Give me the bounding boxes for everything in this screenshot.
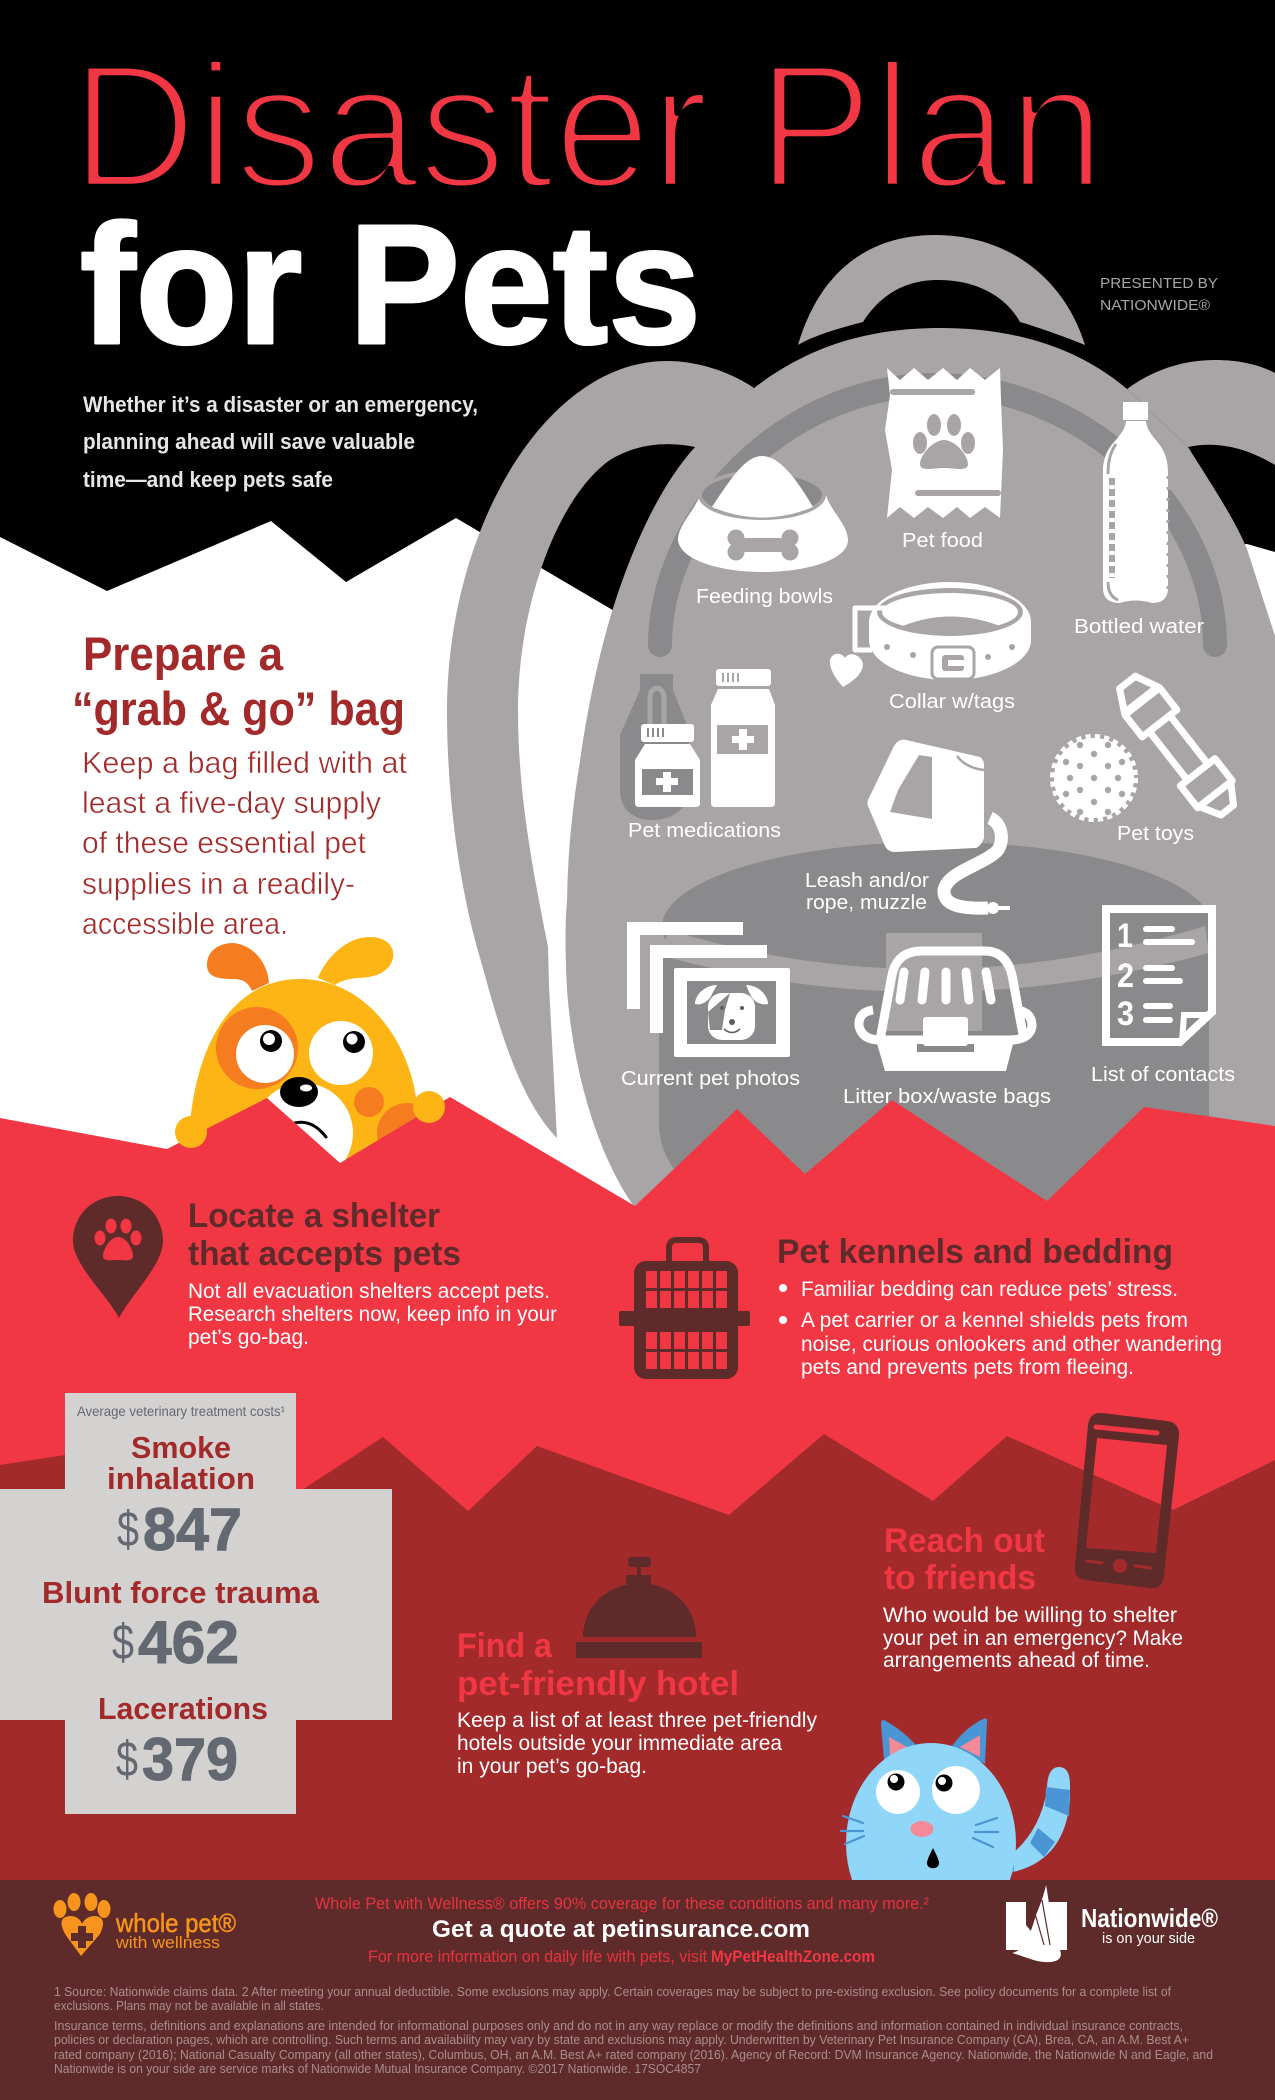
reach out body text: your pet in an emergency? Make <box>883 1627 1183 1650</box>
shelter body text <box>188 1280 557 1349</box>
backpack item labels: rope, muzzle <box>806 892 927 914</box>
section: reach out to friends <box>883 1413 1183 1672</box>
backpack item labels: Pet toys <box>1117 823 1194 845</box>
cost: smoke inhalation: $ <box>117 1501 139 1557</box>
hotel body text: in your pet’s go-bag. <box>457 1755 647 1778</box>
cost: blunt force trauma: $ <box>112 1614 134 1670</box>
logo: nationwide: is on your side <box>1102 1930 1195 1947</box>
kennel bullet list <box>779 1278 1222 1379</box>
icon: pet medications <box>620 669 775 820</box>
heading: pet kennels and bedding: Pet kennels and bedding <box>777 1233 1173 1271</box>
dog portrait in photo <box>695 985 768 1040</box>
illustration: cat <box>841 1718 1070 1943</box>
background: dark red mountains <box>0 1434 1275 1900</box>
footer background <box>0 1880 1275 2100</box>
cost: smoke inhalation: inhalation <box>107 1461 255 1496</box>
fine print: 1 Source: Nationwide claims data. 2 After meeting your annual deductible. Some exclusions may apply. Certain coverages may be subject to pre-existing exclusion. See policy documents for a complete list of <box>54 1984 1171 1999</box>
heading: reach out: Reach out <box>884 1522 1045 1560</box>
grab and go body text: least a five-day supply <box>82 785 381 820</box>
logo: whole pet with wellness: with wellness <box>115 1933 220 1952</box>
presented by credit: PRESENTED BY <box>1100 275 1218 292</box>
backpack item labels: Litter box/waste bags <box>843 1086 1051 1108</box>
grab and go body text <box>82 745 407 941</box>
heading: find a hotel: Find a <box>457 1627 553 1665</box>
icon: contact list: 1 <box>1117 917 1133 955</box>
heading: find a hotel <box>457 1627 739 1703</box>
cost: lacerations: Lacerations <box>98 1691 268 1726</box>
reach out body text <box>883 1604 1183 1672</box>
grab and go body text: supplies in a readily- <box>82 866 355 901</box>
grab and go body text: of these essential pet <box>82 825 366 860</box>
cost: smoke inhalation <box>107 1430 255 1563</box>
backpack body <box>566 328 1275 1210</box>
panel: footer <box>0 1880 1275 2100</box>
kennel bullet list: noise, curious onlookers and other wandering <box>801 1333 1222 1356</box>
icon: retractable leash <box>868 740 1010 914</box>
fine print <box>54 1984 1213 2076</box>
shelter body text: Research shelters now, keep info in your <box>188 1303 557 1326</box>
hotel body text <box>457 1709 817 1778</box>
footer offer text <box>315 1894 929 1966</box>
intro text: time—and keep pets safe <box>83 467 333 492</box>
icon: pet kennel <box>619 1240 750 1379</box>
reach out body text: arrangements ahead of time. <box>883 1649 1150 1672</box>
icon: pet photos <box>634 928 790 1057</box>
costs caption: Average veterinary treatment costs¹ <box>77 1403 285 1419</box>
logo: nationwide <box>1006 1885 1218 1962</box>
backpack item labels: Collar w/tags <box>889 691 1015 713</box>
heading: grab and go: Prepare a <box>83 627 284 680</box>
backpack item labels <box>621 530 1235 1108</box>
backpack item labels: Leash and/or <box>805 870 929 892</box>
cost: blunt force trauma: 462 <box>138 1609 239 1676</box>
backpack handle <box>798 235 1085 345</box>
section: locate a shelter <box>73 1196 557 1349</box>
icon: map pin with paw <box>73 1196 163 1318</box>
backpack front pocket <box>659 842 1212 1260</box>
intro text: Whether it’s a disaster or an emergency, <box>83 392 478 417</box>
icon: litter carrier <box>859 951 1032 1071</box>
intro text <box>83 392 478 492</box>
backpack item labels: List of contacts <box>1091 1064 1235 1086</box>
background: red mountains <box>0 1097 1275 1900</box>
backpack zipper arc <box>660 385 1215 645</box>
icon: collar with tag <box>830 582 1031 687</box>
illustration: dog peeking <box>189 937 437 1183</box>
heading: grab and go <box>72 627 405 735</box>
footer offer text: Get a quote at petinsurance.com <box>432 1916 810 1943</box>
icon: contact list: 2 <box>1117 957 1134 995</box>
title line: Disaster Plan: Disaster Plan <box>71 27 1105 225</box>
shelter body text: Not all evacuation shelters accept pets. <box>188 1280 550 1303</box>
cost: lacerations: 379 <box>142 1726 238 1793</box>
heading: reach out: to friends <box>884 1559 1036 1597</box>
icon: pet food bag <box>885 368 1003 518</box>
reach out body text: Who would be willing to shelter <box>883 1604 1177 1627</box>
fine print: Nationwide is on your side are service marks of Nationwide Mutual Insurance Company. ©2017 Nationwide. 17SOC4857 <box>54 2061 701 2076</box>
backpack item labels: Feeding bowls <box>696 586 833 608</box>
title <box>71 27 1105 380</box>
heading: locate a shelter: that accepts pets <box>188 1235 461 1273</box>
icon: hotel bell <box>576 1557 702 1658</box>
icon: contact list <box>1106 909 1212 1042</box>
background: black sky <box>0 0 1275 1300</box>
logo: whole pet with wellness: whole pet® <box>115 1908 236 1938</box>
backpack item labels: Pet medications <box>628 820 781 842</box>
cost: lacerations: $ <box>116 1731 138 1787</box>
section: pet kennels and bedding <box>619 1233 1222 1379</box>
section: pet-friendly hotel <box>457 1557 817 1778</box>
kennel bullet list: pets and prevents pets from fleeing. <box>801 1356 1134 1379</box>
grab and go body text: accessible area. <box>82 906 288 941</box>
presented by credit <box>1100 275 1218 314</box>
kennel bullet list: A pet carrier or a kennel shields pets from <box>801 1309 1188 1332</box>
icon: pet toys <box>1054 669 1245 824</box>
backpack left strap <box>447 361 754 1138</box>
grab and go body text: Keep a bag filled with at <box>82 745 407 780</box>
cost: smoke inhalation: 847 <box>143 1496 242 1563</box>
title line: for Pets: for Pets <box>80 190 701 380</box>
intro text: planning ahead will save valuable <box>83 429 415 454</box>
section: grab and go bag <box>72 627 407 941</box>
background: white mountains <box>0 518 1275 1300</box>
heading: find a hotel: pet-friendly hotel <box>457 1665 739 1703</box>
backpack item labels: Current pet photos <box>621 1068 800 1090</box>
icon: bottled water <box>1103 402 1168 603</box>
dog paws <box>175 1091 445 1148</box>
icon: phone <box>1075 1413 1179 1588</box>
cost: smoke inhalation: Smoke <box>131 1430 231 1465</box>
hotel body text: hotels outside your immediate area <box>457 1732 782 1755</box>
backpack item labels: Bottled water <box>1074 616 1204 638</box>
footer offer text: For more information on daily life with pets, visit <box>368 1947 707 1966</box>
backpack item labels: Pet food <box>902 530 983 552</box>
fine print: exclusions. Plans may not be available in all states. <box>54 1998 324 2013</box>
logo: whole pet with wellness <box>54 1893 236 1956</box>
cross shape <box>0 1393 392 1814</box>
cost: blunt force trauma <box>42 1575 320 1676</box>
presented by credit: NATIONWIDE® <box>1100 297 1210 314</box>
illustration: backpack <box>447 235 1275 1260</box>
heading: locate a shelter <box>188 1197 461 1273</box>
fine print: policies or declaration pages, which are controlling. Such terms and availability may vary by state and exclusions may apply. Underwritten by Veterinary Pet Insurance Company (CA), Brea, CA, an A.M. Best A+ <box>54 2032 1189 2047</box>
icon: contact list: 3 <box>1117 995 1134 1033</box>
icon: feeding bowl <box>678 456 848 572</box>
footer offer text: Whole Pet with Wellness® offers 90% coverage for these conditions and many more.² <box>315 1894 929 1913</box>
cost: blunt force trauma: Blunt force trauma <box>42 1575 320 1610</box>
heading: reach out <box>884 1522 1045 1597</box>
cost: lacerations <box>98 1691 268 1793</box>
footer offer text: MyPetHealthZone.com <box>711 1947 875 1966</box>
hotel body text: Keep a list of at least three pet-friendly <box>457 1709 817 1732</box>
fine print: Insurance terms, definitions and explanations are intended for informational purposes only and do not in any way replace or modify the definitions and information contained in individual insurance contracts, <box>54 2018 1183 2033</box>
logo: nationwide: Nationwide® <box>1081 1903 1218 1933</box>
shelter body text: pet’s go-bag. <box>188 1326 309 1349</box>
backpack right strap <box>1127 360 1275 465</box>
heading: grab and go: “grab & go” bag <box>72 682 405 735</box>
heading: locate a shelter: Locate a shelter <box>188 1197 440 1235</box>
panel: veterinary costs cross <box>0 1393 392 1814</box>
kennel bullet list: Familiar bedding can reduce pets’ stress. <box>801 1278 1178 1301</box>
fine print: rated company (2016); National Casualty Company (all other states), Columbus, OH, an A.M. Best A+ rated company (2016). Agency of Record: DVM Insurance Agency. Nationwide, the Nationwide N and Eagle, and <box>54 2047 1213 2062</box>
